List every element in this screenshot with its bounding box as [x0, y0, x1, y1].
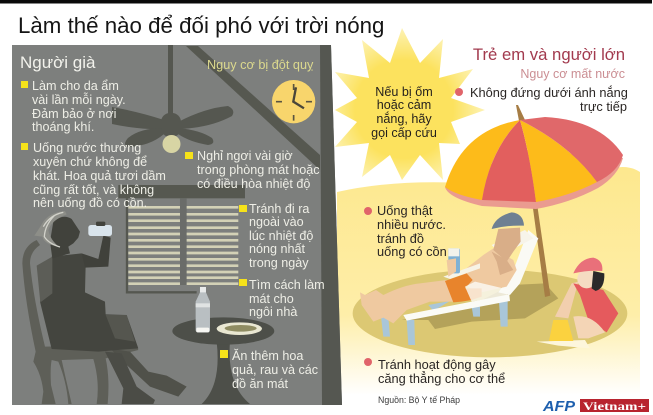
text: tip 1: thoáng khí.	[32, 120, 94, 134]
logo: Vietnam+: Vietnam+	[583, 399, 646, 413]
icon: sun	[335, 28, 485, 180]
hair	[34, 211, 67, 248]
heading: Người già: Người già	[20, 53, 96, 72]
chair	[22, 240, 138, 404]
subheading: dehydration risk: Nguy cơ mất nước	[520, 67, 625, 81]
text: tip 5: ngôi nhà	[249, 305, 297, 319]
table with bottle and plate	[172, 287, 274, 404]
text: sun callout: nắng, hãy	[376, 111, 432, 126]
icon: beach umbrella	[445, 105, 623, 209]
text: tip 2: nên uống đồ có cồn.	[33, 196, 147, 210]
panel: elderly room	[12, 45, 342, 405]
text: avoid stress	[364, 357, 505, 386]
icon: clock	[272, 80, 315, 123]
text: drink water	[364, 203, 447, 259]
top bar	[0, 0, 652, 4]
text: drink water: uống có cồn	[377, 244, 447, 259]
text: tip 1: Đảm bảo ở nơi	[32, 107, 116, 121]
text: drink water: nhiều nước.	[377, 217, 446, 232]
text: tip 2: cũng rất tốt, và không	[33, 183, 154, 197]
text: sun callout: Nếu bị ốm	[375, 85, 433, 99]
sand castle	[537, 340, 590, 348]
ceiling fan	[112, 45, 233, 153]
text: tip 3: trong phòng mát hoặc	[197, 163, 320, 177]
text: tip 6	[220, 348, 318, 391]
text: sun callout: hoặc cảm	[377, 98, 431, 112]
text: tip 5: Tìm cách làm	[249, 278, 325, 292]
arm	[82, 236, 111, 268]
text: tip 1: Làm cho da ẩm	[32, 79, 119, 93]
text: tip 1: vài lần mỗi ngày.	[32, 92, 126, 107]
text: tip 6: đồ ăn mát	[232, 377, 289, 391]
text: tip 4: Tránh đi ra	[249, 202, 309, 216]
text: drink water: tránh đồ	[377, 231, 424, 246]
panel: sand background	[337, 167, 640, 395]
text: avoid direct sun	[455, 85, 628, 114]
text: drink water: Uống thật	[377, 203, 433, 218]
text: tip 3: có điều hòa nhiệt độ	[197, 177, 310, 191]
wall strip	[320, 45, 342, 405]
title: Làm thế nào để đối phó với trời nóng	[18, 13, 384, 38]
text: avoid stress: căng thẳng cho cơ thể	[378, 371, 505, 386]
text: tip 2: khát. Hoa quả tươi dầm	[33, 169, 166, 183]
text: tip 4: nóng nhất	[249, 242, 306, 256]
text: tip 1	[21, 79, 126, 134]
text: tip 3: Nghỉ ngơi vài giờ	[197, 149, 293, 163]
text: tip 2: Uống nước thường	[33, 141, 141, 155]
chair legs	[381, 300, 508, 345]
child	[555, 258, 618, 338]
ceiling beam	[186, 46, 320, 170]
text: sun callout	[371, 85, 437, 140]
man	[360, 212, 524, 323]
logo: AFP: AFP	[542, 398, 576, 415]
chair seat	[403, 294, 510, 321]
subheading: stroke risk: Nguy cơ bị đột quỵ	[207, 58, 314, 72]
umbrella pole	[532, 203, 550, 297]
text: source: Nguồn: Bộ Y tế Pháp	[378, 395, 460, 405]
text: sun callout: gọi cấp cứu	[371, 126, 437, 140]
window shutters	[118, 185, 245, 292]
text: avoid stress: Tránh hoạt động gây	[378, 357, 496, 372]
text: tip 6: quả, rau và các	[232, 363, 318, 377]
beach scene	[353, 203, 627, 357]
text: tip 2: xuyên chứ không để	[33, 155, 147, 169]
text: tip 3	[185, 149, 320, 191]
legs	[110, 348, 187, 397]
text: tip 6: Ăn thêm hoa	[232, 348, 303, 363]
text: tip 5: mát cho	[249, 292, 294, 306]
chair back	[498, 230, 538, 295]
text: avoid direct sun: Không đứng dưới ánh nắng	[470, 85, 628, 100]
heading: children and adults: Trẻ em và người lớn	[473, 45, 625, 64]
text: tip 4: lúc nhiệt độ	[249, 229, 313, 243]
text: tip 4	[239, 202, 313, 270]
elderly person on chair	[22, 211, 187, 404]
text: tip 2	[21, 141, 166, 210]
text: tip 4: ngoài vào	[249, 215, 304, 229]
text: tip 5	[239, 278, 325, 319]
sand oval	[353, 269, 627, 357]
dress	[40, 253, 138, 352]
water bottle	[88, 225, 112, 236]
head	[50, 217, 80, 258]
text: avoid direct sun: trực tiếp	[580, 99, 627, 114]
text: tip 4: trong ngày	[249, 256, 309, 270]
shadow	[402, 283, 558, 329]
